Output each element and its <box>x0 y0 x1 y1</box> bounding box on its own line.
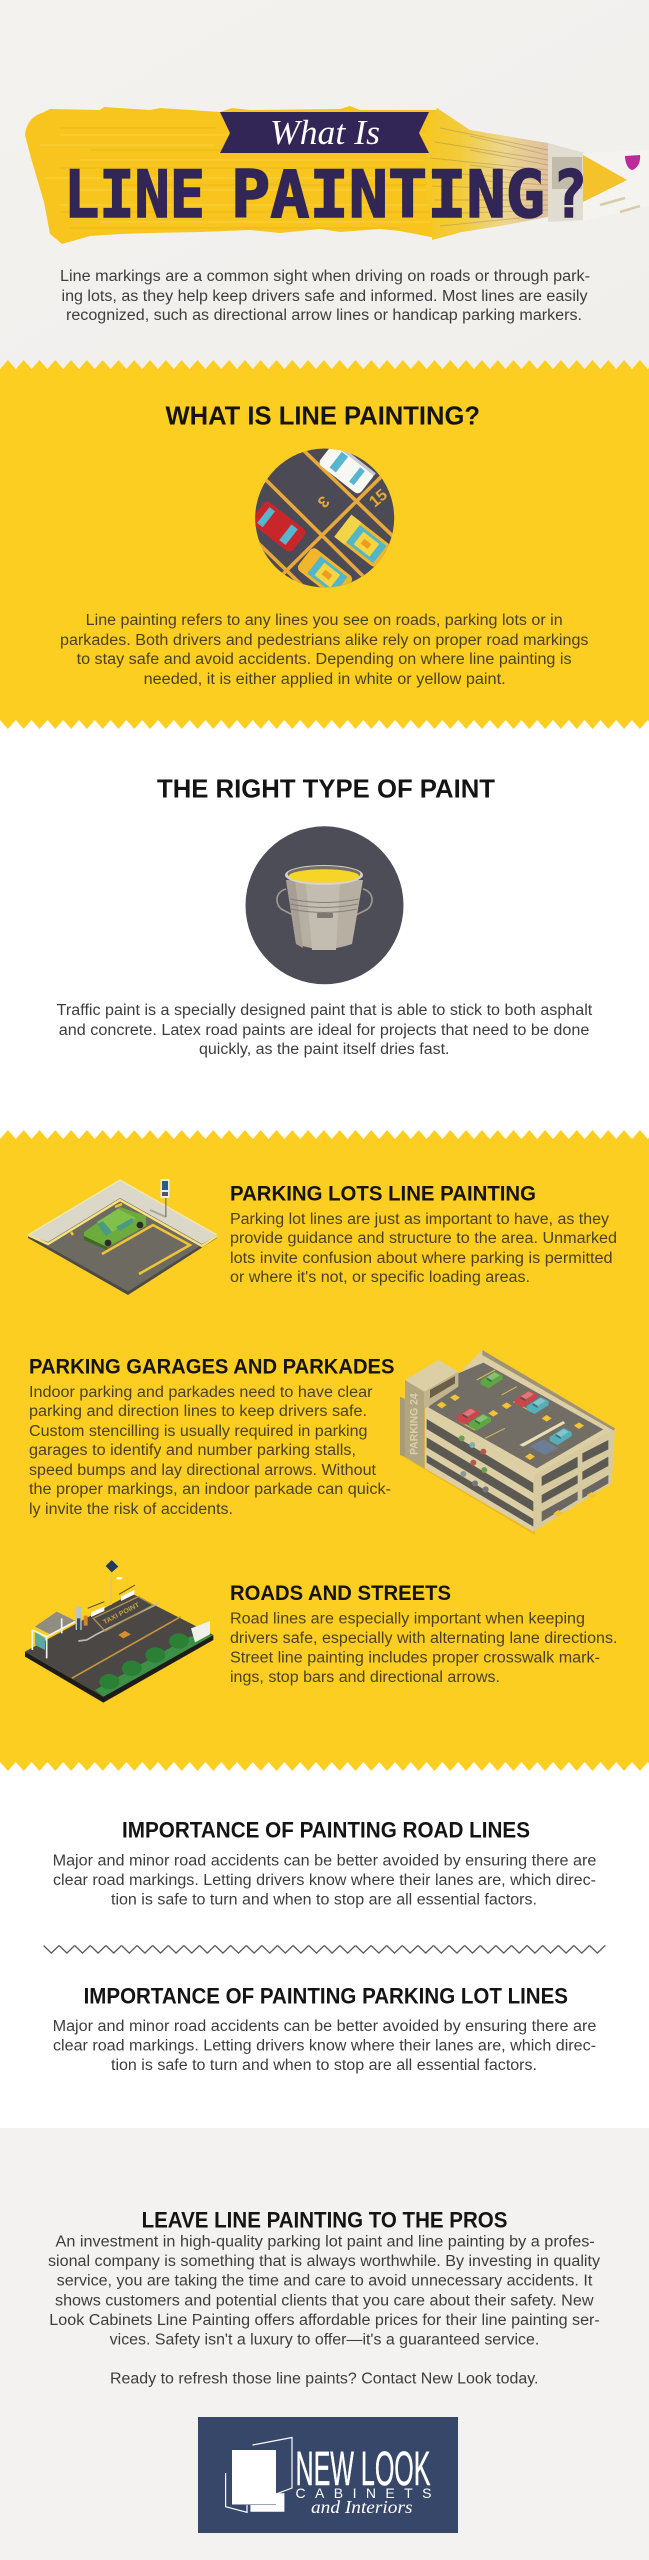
stair tower: PARKING 24 <box>409 1393 421 1455</box>
logo: New Look Cabinets and Interiors <box>198 2417 458 2533</box>
paragraph: investment: An investment in high-quality parking lot paint and line painting by a profes- <box>56 2234 595 2251</box>
paragraph: parking garages: garages to identify and number parking stalls, <box>29 1442 356 1459</box>
heading: what is line painting: WHAT IS LINE PAINTING? <box>166 400 480 430</box>
paragraph: road lines <box>53 1852 596 1908</box>
green car <box>84 1207 146 1250</box>
paragraph: road lines: Major and minor road accidents can be better avoided by ensuring there are <box>53 1852 596 1870</box>
illustration: road and taxi point <box>25 1560 213 1703</box>
main title: LINE PAINTING?: ? <box>553 158 587 233</box>
brush handle <box>583 150 649 221</box>
main title: LINE PAINTING?: LINE <box>64 158 205 233</box>
lamp post and sign <box>106 1560 122 1605</box>
paragraph: parking garages: Custom stencilling is usually required in parking <box>29 1423 368 1440</box>
intro paragraph: recognized, such as directional arrow lines or handicap parking markers. <box>66 307 582 324</box>
paragraph: investment: vices. Safety isn't a luxury to offer—it's a guaranteed service. <box>110 2331 539 2348</box>
panel: importance of painting road lines <box>53 1818 596 1908</box>
hero background <box>0 0 649 368</box>
logo: New Look Cabinets and Interiors: CABINETS <box>296 2485 432 2501</box>
white roadside box <box>191 1621 210 1642</box>
paint stroke and brush illustration <box>25 106 649 244</box>
illustration: road and taxi point: TAXI POINT <box>102 1602 141 1626</box>
paragraph: traffic paint: Traffic paint is a specially designed paint that is able to stick to both asphalt <box>57 1002 593 1019</box>
paragraph: investment: sional company is something that is always worthwhile. By investing in quality <box>48 2253 600 2270</box>
paragraph: investment: shows customers and potential clients that you care about their safety. New <box>55 2292 594 2309</box>
icon: parking lot circle: 15 <box>366 486 391 511</box>
paragraph: parking garages: parking and direction lines to keep drivers safe. <box>29 1403 367 1420</box>
paragraph: parking garages: speed bumps and lay directional arrows. Without <box>29 1462 377 1479</box>
icon: paint bucket <box>246 826 404 984</box>
paragraph: line painting definition: Line painting refers to any lines you see on roads, parking lots or in <box>86 612 563 629</box>
paragraph: investment: service, you are taking the time and care to avoid unnecessary accidents. It <box>57 2273 593 2290</box>
heading: the right type of paint: THE RIGHT TYPE OF PAINT <box>157 774 495 804</box>
paragraph: parking lot lines: tion is safe to turn and when to stop are all essential factors. <box>111 2057 537 2074</box>
panel: what is line painting <box>0 360 649 729</box>
paragraph: parking lots: Parking lot lines are just as important to have, as they <box>230 1211 609 1228</box>
main title: LINE PAINTING? <box>64 158 587 233</box>
pink paint drop <box>625 155 640 170</box>
heading: roads and streets: ROADS AND STREETS <box>230 1581 451 1605</box>
paragraph: parking lot lines: clear road markings. Letting drivers know where their lanes are, which direc- <box>53 2038 596 2055</box>
paragraph: parking garages <box>29 1384 391 1518</box>
paragraph: parking garages: Indoor parking and parkades need to have clear <box>29 1384 373 1401</box>
icon: parking lot circle <box>255 448 394 588</box>
logo: New Look Cabinets and Interiors: and Interiors <box>311 2497 412 2517</box>
ribbon with What Is <box>220 112 429 153</box>
paragraph: parking lots: or where it's not, or specific loading areas. <box>230 1269 530 1286</box>
paragraph: parking lot lines: Major and minor road accidents can be better avoided by ensuring there are <box>53 2018 596 2035</box>
paragraph: roads and streets: Road lines are especially important when keeping <box>230 1610 585 1628</box>
barriers <box>88 1585 135 1617</box>
brush ferrule <box>548 143 585 222</box>
paragraph: roads and streets: ings, stop bars and directional arrows. <box>230 1669 500 1686</box>
paragraph: parking lots <box>230 1211 617 1286</box>
heading: parking garages and parkades: PARKING GARAGES AND PARKADES <box>29 1354 394 1378</box>
panel: leave line painting to the pros <box>0 2128 649 2560</box>
icon: parking lot circle: 3 <box>314 492 332 511</box>
paragraph: investment <box>48 2234 600 2348</box>
intro paragraph: ing lots, as they help keep drivers safe and informed. Most lines are easily <box>62 288 588 305</box>
panel: line painting locations <box>0 1130 649 1771</box>
paint stroke <box>25 106 436 244</box>
illustration: parking lot <box>28 1179 217 1295</box>
main title: LINE PAINTING?: PAINTING <box>231 158 545 233</box>
paragraph: line painting definition: to stay safe and avoid accidents. Depending on where line painting is <box>77 651 572 668</box>
paragraph: parking lots: lots invite confusion about where parking is permitted <box>230 1250 613 1267</box>
heading: importance of painting road lines: IMPORTANCE OF PAINTING ROAD LINES <box>122 1818 530 1842</box>
paragraph: traffic paint <box>57 1002 593 1058</box>
panel: importance of painting parking lot lines <box>53 1984 596 2074</box>
paragraph: road lines: tion is safe to turn and when to stop are all essential factors. <box>111 1892 537 1908</box>
bushes <box>99 1633 189 1689</box>
roof marks and cars <box>437 1370 584 1460</box>
paragraph: parking garages: ly invite the risk of accidents. <box>29 1501 233 1518</box>
paragraph: road lines: clear road markings. Letting drivers know where their lanes are, which direc- <box>53 1872 596 1889</box>
parking sign <box>150 1179 170 1217</box>
logo: New Look Cabinets and Interiors: NEW LOOK <box>296 2443 430 2496</box>
paragraph: parking garages: the proper markings, an indoor parkade can quick- <box>29 1481 391 1498</box>
heading: parking lots line painting: PARKING LOTS LINE PAINTING <box>230 1182 536 1206</box>
panel: the right type of paint <box>57 774 593 1058</box>
bus shelter <box>32 1607 88 1658</box>
paragraph: line painting definition: parkades. Both drivers and pedestrians alike rely on proper road markings <box>60 632 589 649</box>
illustration: parking garage building <box>400 1350 615 1535</box>
paragraph: roads and streets: drivers safe, especially with alternating lane directions. <box>230 1630 618 1647</box>
heading: importance of painting parking lot lines: IMPORTANCE OF PAINTING PARKING LOT LINES <box>84 1984 568 2008</box>
ribbon with What Is: What Is <box>270 113 380 152</box>
call to action: Ready to refresh those line paints? Contact New Look today. <box>110 2371 538 2388</box>
paragraph: parking lots: provide guidance and structure to the area. Unmarked <box>230 1230 617 1247</box>
cars inside levels <box>459 1435 597 1517</box>
paragraph: roads and streets <box>230 1610 618 1686</box>
paragraph: investment: Look Cabinets Line Painting offers affordable prices for their line painting ser- <box>49 2312 600 2329</box>
paragraph: parking lot lines <box>53 2018 596 2074</box>
heading: leave line painting to the pros: LEAVE LINE PAINTING TO THE PROS <box>142 2208 507 2232</box>
stair tower <box>400 1360 458 1468</box>
intro paragraph <box>60 268 590 324</box>
paragraph: traffic paint: and concrete. Latex road paints are ideal for projects that need to be done <box>59 1022 589 1039</box>
paragraph: roads and streets: Street line painting includes proper crosswalk mark- <box>230 1650 600 1666</box>
paragraph: line painting definition <box>60 612 589 688</box>
paragraph: traffic paint: quickly, as the paint itself dries fast. <box>199 1041 450 1058</box>
intro paragraph: Line markings are a common sight when driving on roads or through park- <box>60 268 590 285</box>
paragraph: line painting definition: needed, it is either applied in white or yellow paint. <box>144 671 506 688</box>
brush bristles <box>422 108 548 240</box>
